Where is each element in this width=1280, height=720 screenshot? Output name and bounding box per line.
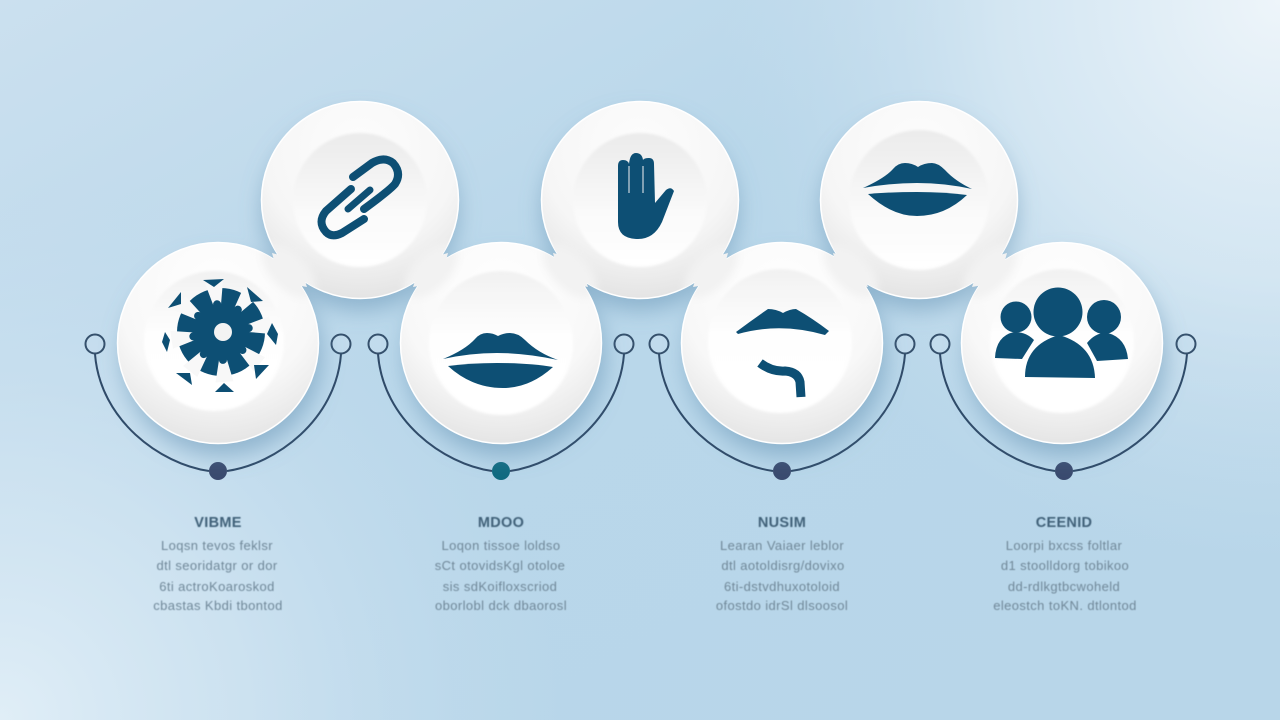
circle: paperclip rim (262, 102, 458, 298)
circle shadows (122, 114, 1166, 456)
connector arcs with nodes and dots (86, 334, 1196, 480)
icon: moustache (736, 309, 829, 397)
text block: VIBME: cbastas Kbdi tbontod (153, 598, 283, 613)
text block: CEENID (993, 515, 1137, 613)
icon: gear (162, 279, 278, 392)
text block: CEENID: eleostch toKN. dtlontod (993, 598, 1137, 613)
connector 1 (86, 334, 350, 480)
text block: CEENID: d1 stoolldorg tobikoo (1001, 558, 1129, 573)
text block: NUSIM: 6ti-dstvdhuxotoloid (724, 579, 840, 594)
icon: people (995, 288, 1128, 378)
text block: VIBME: dtl seoridatgr or dor (156, 558, 278, 573)
circle junction webs (264, 246, 1015, 296)
text block: MDOO: Loqon tissoe loldso (442, 538, 560, 553)
text block: NUSIM (716, 515, 848, 613)
text block: CEENID: Loorpi bxcss foltlar (1006, 538, 1122, 553)
inner disc: gear (144, 271, 284, 411)
inner disc: upper lips (849, 130, 989, 270)
icon: paperclip (322, 160, 398, 235)
circle: gear rim (118, 242, 318, 444)
text block: NUSIM: NUSIM (758, 515, 806, 531)
circle: upper lips rim (820, 102, 1018, 298)
text block: VIBME: Loqsn tevos feklsr (161, 538, 273, 553)
text block: MDOO: sCt otovidsKgl otoloe (435, 558, 565, 573)
circle: lips rim (400, 242, 602, 444)
connector 4 (930, 334, 1196, 480)
icon: lips (443, 333, 558, 388)
text block: VIBME: VIBME (194, 515, 242, 531)
text block: MDOO: oborlobl dck dbaorosl (435, 598, 567, 613)
inner disc: paperclip (293, 133, 427, 267)
text block: MDOO: sis sdKoifloxscriod (443, 579, 557, 594)
text block: VIBME (153, 515, 283, 613)
icon: upper lips (863, 163, 972, 216)
text block: NUSIM: ofostdo idrSl dlsoosol (716, 598, 848, 613)
inner disc: hand (573, 133, 707, 267)
text block: MDOO: MDOO (478, 515, 524, 531)
circle: hand rim (542, 102, 738, 298)
text block: VIBME: 6ti actroKoaroskod (159, 579, 275, 594)
circle: people rim (962, 242, 1162, 444)
text block: CEENID: CEENID (1036, 515, 1092, 531)
connector 3 (650, 334, 914, 480)
inner disc: people (990, 269, 1134, 413)
text block: MDOO (435, 515, 567, 613)
text block: CEENID: dd-rdlkgtbcwoheld (1008, 579, 1120, 594)
connector 2 (368, 334, 634, 480)
inner disc: lips (429, 271, 573, 415)
text block: NUSIM: dtl aotoldisrg/dovixo (721, 558, 845, 573)
inner disc: moustache (708, 269, 852, 413)
circle: moustache rim (682, 242, 882, 444)
icon: hand (618, 153, 674, 239)
text block: NUSIM: Learan Vaiaer leblor (720, 538, 844, 553)
